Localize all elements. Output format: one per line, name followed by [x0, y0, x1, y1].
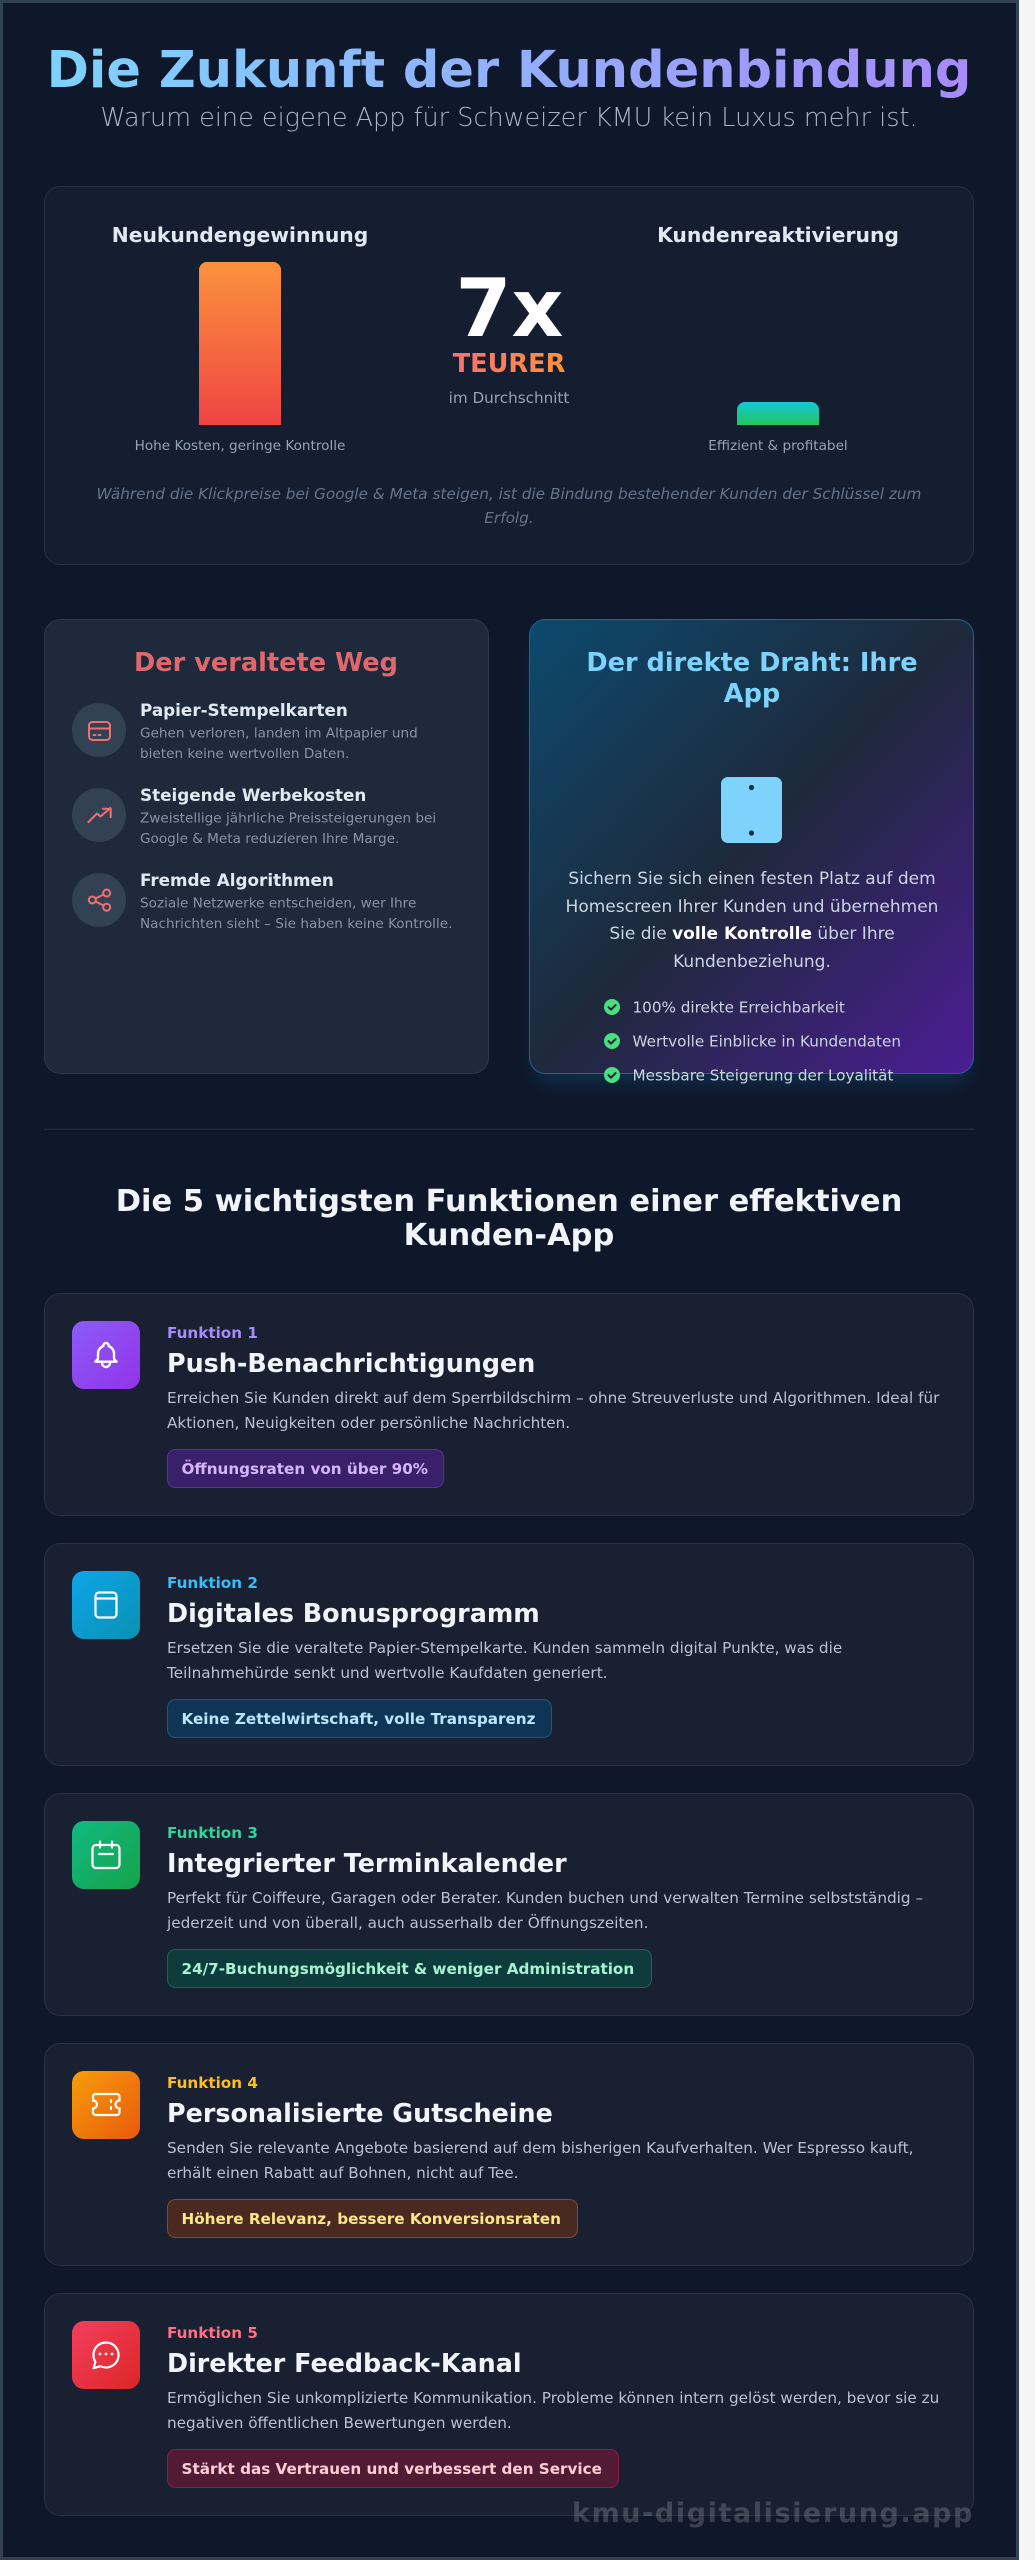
badge — [168, 1700, 552, 1738]
item: foreign algorithms — [72, 870, 452, 932]
panel: feature 3 — [44, 1794, 974, 2016]
badge: Höhere Relevanz, bessere Konversionsraten — [182, 2210, 561, 2228]
panel: feature 1: Funktion 1 — [167, 1324, 258, 1342]
text: app benefit: Sie die volle Kontrolle über Ihre — [609, 924, 895, 944]
panel: the direct line — [530, 620, 974, 1084]
icon: phone — [721, 777, 782, 843]
badge — [168, 2200, 578, 2238]
panel: feature 5: Direkter Feedback-Kanal — [167, 2348, 522, 2378]
icon: bell — [72, 1321, 140, 1389]
panel: feature 2: Teilnahmehürde senkt und wertvolle Kaufdaten generiert. — [166, 1664, 608, 1682]
item: rising ad costs: Steigende Werbekosten — [140, 785, 366, 805]
item: foreign algorithms: Fremde Algorithmen — [140, 870, 334, 890]
panel: feature 3: Perfekt für Coiffeure, Garagen oder Berater. Kunden buchen und verwalten Termine selbstständig – — [167, 1889, 923, 1907]
caption: efficient: Effizient & profitabel — [708, 438, 848, 454]
watermark: kmu-digitalisierung.app — [572, 2498, 974, 2529]
panel: feature 1: Aktionen, Neuigkeiten oder persönliche Nachrichten. — [167, 1414, 570, 1432]
bar: new customers — [199, 262, 281, 425]
note: Während die Klickpreise bei Google & Meta steigen, ist die Bindung bestehender Kunden der Schlüssel zum — [97, 485, 921, 503]
panel: feature 5: Funktion 5 — [167, 2324, 258, 2342]
panel: cost comparison — [44, 186, 974, 564]
item: rising ad costs — [72, 785, 436, 847]
icon: ticket — [72, 2071, 140, 2139]
panel: feature 2: Funktion 2 — [167, 1574, 258, 1592]
list: benefits: 100% direkte Erreichbarkeit — [632, 998, 845, 1016]
badge — [168, 1950, 652, 1988]
panel: feature 2: Ersetzen Sie die veraltete Papier-Stempelkarte. Kunden sammeln digital Punkte, was die — [167, 1639, 842, 1657]
item: paper cards: Papier-Stempelkarten — [140, 700, 348, 720]
heading: App — [724, 679, 780, 709]
section heading — [116, 1184, 902, 1253]
item: paper cards: Gehen verloren, landen im Altpapier und — [140, 726, 418, 742]
text: app benefit — [566, 869, 938, 972]
heading: Neukundengewinnung: Neukundengewinnung — [112, 223, 368, 247]
badge: 24/7-Buchungsmöglichkeit & weniger Administration — [182, 1960, 634, 1978]
text: app benefit: Sichern Sie sich einen festen Platz auf dem — [568, 869, 936, 889]
panel: feature 2 — [44, 1544, 974, 1766]
panel: feature 4: Funktion 4 — [167, 2074, 258, 2092]
panel: feature 4 — [44, 2044, 974, 2266]
item: paper cards: bieten keine wertvollen Daten. — [140, 746, 349, 762]
panel: feature 1: Push-Benachrichtigungen — [167, 1348, 535, 1378]
bar: reactivation — [737, 402, 819, 425]
item: foreign algorithms: Soziale Netzwerke entscheiden, wer Ihre — [140, 896, 416, 912]
icon: card — [89, 722, 110, 740]
badge — [168, 1450, 444, 1488]
heading: Der direkte Draht: Ihre — [586, 648, 918, 678]
panel: feature 3: Integrierter Terminkalender — [167, 1848, 567, 1878]
panel: feature 3: jederzeit und von überall, auch ausserhalb der Öffnungszeiten. — [166, 1913, 648, 1932]
panel: feature 5: Ermöglichen Sie unkomplizierte Kommunikation. Probleme können intern gelöst werden, bevor sie zu — [167, 2389, 939, 2407]
panel: feature 5: negativen öffentlichen Bewertungen werden. — [167, 2414, 512, 2432]
badge: Keine Zettelwirtschaft, volle Transparenz — [182, 1710, 536, 1728]
item: rising ad costs: Zweistellige jährliche Preissteigerungen bei — [140, 810, 436, 826]
note — [97, 485, 921, 527]
icon: calendar — [72, 1821, 140, 1889]
icon: chat — [72, 2321, 140, 2389]
icon: trend — [88, 808, 111, 822]
heading: Der veraltete Weg — [134, 648, 398, 678]
badge: Stärkt das Vertrauen und verbessert den Service — [182, 2460, 602, 2478]
panel: feature 5 — [44, 2294, 974, 2516]
icon: card — [72, 1571, 140, 1639]
subtitle: Warum eine eigene App für Schweizer KMU kein Luxus mehr ist. — [100, 103, 918, 133]
text: app benefit: Kundenbeziehung. — [673, 952, 831, 972]
item: foreign algorithms: Nachrichten sieht – Sie haben keine Kontrolle. — [140, 916, 452, 932]
icon: share — [89, 890, 110, 911]
item: paper cards — [72, 700, 418, 762]
section heading: Die 5 wichtigsten Funktionen einer effektiven — [116, 1184, 902, 1219]
panel: the outdated way — [44, 620, 488, 1074]
list: benefits: Messbare Steigerung der Loyalität — [632, 1066, 893, 1084]
section heading: Kunden-App — [404, 1218, 614, 1253]
heading — [586, 648, 918, 709]
panel: feature 1 — [44, 1294, 974, 1516]
badge — [168, 2450, 618, 2488]
badge: Öffnungsraten von über 90% — [182, 1459, 428, 1478]
stat label: teurer: TEURER — [453, 349, 566, 379]
panel: feature 2: Digitales Bonusprogramm — [167, 1598, 540, 1628]
panel: feature 3: Funktion 3 — [167, 1824, 258, 1842]
note: Erfolg. — [484, 509, 534, 527]
panel: feature 4: erhält einen Rabatt auf Bohnen, nicht auf Tee. — [167, 2164, 519, 2182]
stat: 7x: 7x — [456, 261, 563, 355]
panel: feature 1: Erreichen Sie Kunden direkt auf dem Sperrbildschirm – ohne Streuverluste und Algorithmen. Ideal für — [167, 1389, 940, 1407]
stat note: im Durchschnitt — [449, 389, 569, 407]
panel: feature 4: Personalisierte Gutscheine — [167, 2098, 553, 2128]
heading: Kundenreaktivierung: Kundenreaktivierung — [657, 223, 899, 247]
list: benefits — [604, 998, 901, 1084]
text: app benefit: Homescreen Ihrer Kunden und übernehmen — [566, 897, 938, 917]
list: benefits: Wertvolle Einblicke in Kundendaten — [632, 1032, 901, 1050]
panel: feature 4: Senden Sie relevante Angebote basierend auf dem bisherigen Kaufverhalten. Wer Espresso kauft, — [167, 2139, 913, 2157]
item: rising ad costs: Google & Meta reduzieren Ihre Marge. — [140, 831, 399, 847]
caption: high cost: Hohe Kosten, geringe Kontrolle — [135, 438, 345, 454]
title: Die Zukunft der Kundenbindung — [47, 41, 971, 100]
